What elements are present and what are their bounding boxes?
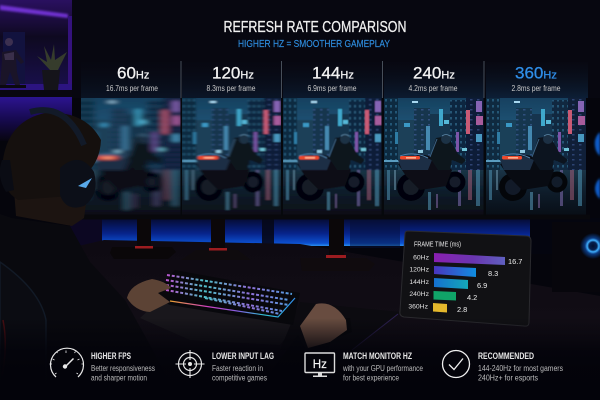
panel: 240Hz: 240Hz <box>413 64 455 82</box>
panel: 360Hz highlighted: 2.8ms per frame <box>512 84 561 93</box>
panel: 360Hz highlighted: 360Hz <box>515 64 557 82</box>
text block: match monitor hz: MATCH MONITOR HZ <box>343 351 412 361</box>
icon: check circle <box>442 350 470 378</box>
text block: higher fps <box>91 351 155 382</box>
text block: lower input lag <box>212 351 274 382</box>
bar row: 120Hz: 120Hz <box>409 266 430 274</box>
keyboard <box>152 270 300 325</box>
text block: match monitor hz <box>342 351 423 382</box>
figure on shelf <box>0 38 26 88</box>
bar row: 144Hz: 144Hz <box>409 279 430 286</box>
bar row: 240Hz: 240Hz <box>409 291 430 298</box>
headset band <box>30 110 84 145</box>
bar row: 120Hz <box>409 266 498 278</box>
text block: recommended <box>478 351 563 382</box>
text block: recommended: 144-240Hz for most gamers <box>478 364 563 373</box>
tablet frame time chart <box>400 231 531 326</box>
text block: recommended: RECOMMENDED <box>478 351 534 361</box>
panel: 120Hz: 120Hz <box>212 64 254 82</box>
text block: recommended: 240Hz+ for esports <box>478 374 538 382</box>
monitor bezels and dividers <box>78 61 590 220</box>
text block: lower input lag: LOWER INPUT LAG <box>212 351 274 361</box>
pc fans <box>552 132 600 292</box>
text block: lower input lag: Faster reaction in <box>212 364 263 373</box>
text block: higher fps: and sharper motion <box>91 374 147 382</box>
bar row: 240Hz: 4.2 <box>467 293 477 302</box>
neck <box>14 190 88 226</box>
panel: 360Hz highlighted <box>486 66 588 214</box>
dark wall behind monitors <box>72 0 600 98</box>
bar row: 144Hz <box>409 278 487 290</box>
right sleeve <box>250 335 330 400</box>
panel: 144Hz: 6.9ms per frame <box>308 84 357 93</box>
bar row: 240Hz <box>409 291 477 302</box>
panel: 144Hz: 144Hz <box>312 64 354 82</box>
icon: gauge <box>50 348 84 377</box>
chart title: FRAME TIME (ms) <box>414 240 461 248</box>
panel: 60Hz: 16.7ms per frame <box>106 84 158 93</box>
text block: match monitor hz: with your GPU performance <box>342 364 423 373</box>
bar row: 60Hz: 60Hz <box>413 254 430 262</box>
bar row: 144Hz: 6.9 <box>477 281 487 290</box>
icon: monitor Hz <box>305 353 334 377</box>
gaming chair <box>0 262 46 400</box>
panel: 60Hz: 60Hz <box>117 64 149 82</box>
text block: match monitor hz: for best experience <box>343 374 399 382</box>
icon: crosshair <box>176 350 204 378</box>
panel: 240Hz: 4.2ms per frame <box>408 84 458 93</box>
text block: higher fps: Better responsiveness <box>91 364 155 373</box>
panel: 120Hz: 8.3ms per frame <box>206 84 256 93</box>
panel: 240Hz <box>384 66 484 214</box>
bar row: 360Hz: 2.8 <box>457 305 467 314</box>
person with headset <box>0 110 347 400</box>
text block: lower input lag: competitive games <box>212 374 267 382</box>
bar row: 120Hz: 8.3 <box>488 269 498 278</box>
head hair <box>2 113 101 200</box>
desk surface <box>0 240 600 400</box>
panel: 144Hz <box>283 66 382 214</box>
text block: higher fps: HIGHER FPS <box>91 351 131 361</box>
headset ear cup <box>60 160 96 208</box>
desk mats <box>140 290 400 350</box>
bar row: 60Hz <box>413 253 522 266</box>
plant on shelf <box>37 44 67 90</box>
purple lit shelf with figure and plant <box>0 0 72 141</box>
icon: monitor Hz: Hz <box>313 359 327 371</box>
right hand <box>300 303 347 348</box>
subtitle: HIGHER HZ = SMOOTHER GAMEPLAY <box>238 38 390 50</box>
bar row: 360Hz <box>408 303 467 314</box>
bar row: 60Hz: 16.7 <box>508 257 522 266</box>
hoodie body <box>0 214 178 400</box>
bar row: 360Hz: 360Hz <box>408 304 429 310</box>
mouse <box>330 318 352 338</box>
bottom dark fade <box>0 318 600 400</box>
title: REFRESH RATE COMPARISON <box>224 19 406 36</box>
left hand <box>127 279 171 312</box>
panel: 60Hz <box>81 66 180 214</box>
panel: 120Hz <box>182 66 281 214</box>
back wall with blue monitor glow <box>70 218 600 254</box>
monitor stands <box>110 219 375 271</box>
